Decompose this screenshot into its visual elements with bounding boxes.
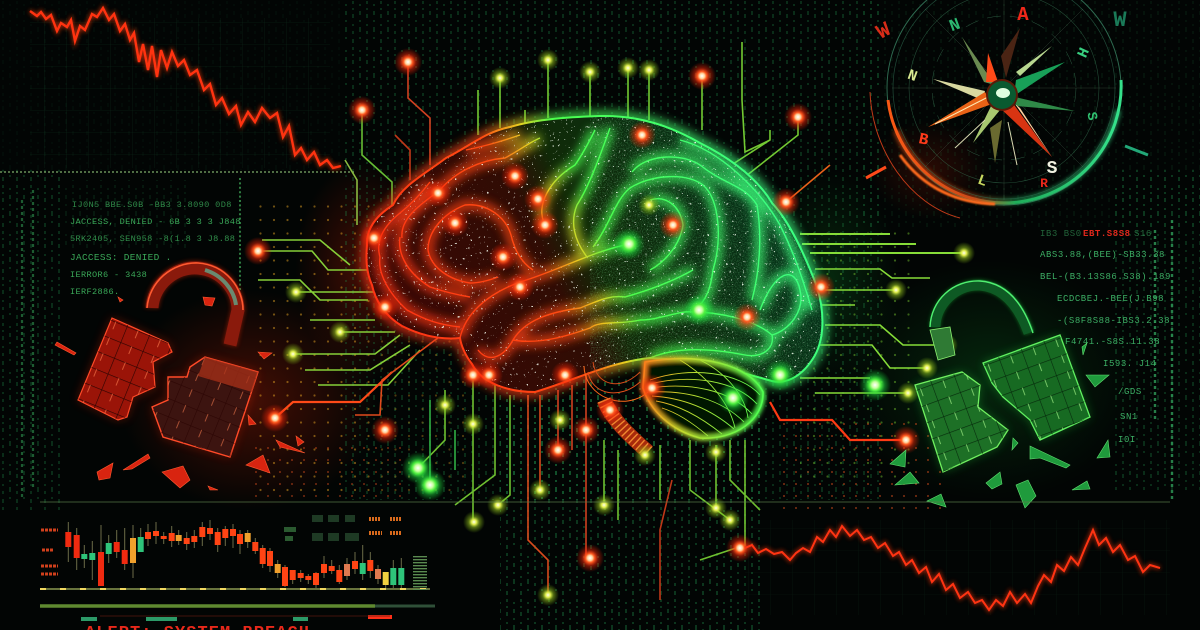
- compass hub: [986, 79, 1018, 111]
- cerebellum: [643, 359, 763, 438]
- brain body fill: [367, 116, 822, 392]
- brain: [360, 110, 830, 400]
- brain folds, soft glow: [379, 128, 812, 358]
- traces: bottom: [418, 375, 760, 600]
- right status text: I593. J14: [1103, 359, 1157, 369]
- compass dial rings: [870, 0, 1121, 218]
- brain folds, crisp lines: [379, 128, 812, 358]
- compass letters: R: [1040, 176, 1048, 191]
- right status text: SN1: [1120, 412, 1138, 422]
- compass letters: B: [917, 130, 931, 150]
- compass letters: W: [1113, 8, 1127, 33]
- compass letters: W: [873, 19, 895, 45]
- compass letters: A: [1017, 4, 1029, 26]
- left status text: JACCESS: DENIED .: [70, 252, 172, 263]
- traces: top: [345, 42, 830, 225]
- right status text: ABS3.88,(BEE)-SB33.38: [1040, 250, 1165, 260]
- compass letters: H: [1075, 45, 1094, 61]
- broken green padlock: [890, 281, 1110, 508]
- traces: right: [770, 234, 964, 440]
- brain outline: [367, 116, 822, 392]
- chart baseline and bars: [40, 588, 430, 590]
- left status text: IERROR6 - 3438: [70, 270, 147, 280]
- green lock body right fragment: [983, 335, 1090, 440]
- right status text: ECDCBEJ.-BEE(J.B98: [1057, 294, 1164, 304]
- compass letters: S: [1047, 159, 1058, 179]
- brain speckles: [360, 110, 830, 400]
- glowing nodes: [244, 48, 975, 606]
- right status text: BEL-(B3.13S86.S38).189: [1040, 272, 1171, 282]
- right status text: S16: [1134, 229, 1152, 239]
- right status text: EBT.S8S8: [1083, 229, 1131, 239]
- red lock shards: [55, 297, 305, 490]
- right status text: IB3 BS0: [1040, 229, 1082, 239]
- green candles: [84, 537, 401, 585]
- green lock shards: [890, 343, 1110, 508]
- falling red line chart, bottom right: [745, 520, 1170, 615]
- compass: [866, 0, 1148, 218]
- left status text: 5RK2405, SEN958 -8(1.8 3 J8.88: [70, 234, 235, 244]
- brain stem: [584, 362, 648, 452]
- compass letters: S: [1082, 111, 1100, 122]
- colour glows: [120, 120, 1140, 510]
- compass letters: N: [947, 16, 963, 37]
- orange and salmon candles: [133, 533, 278, 573]
- compass outer ticks: [866, 146, 1148, 178]
- right status text: [1040, 229, 1171, 445]
- red candles: [68, 532, 125, 586]
- left status text: [70, 200, 241, 297]
- right status text: I0I: [1118, 435, 1136, 445]
- left status text: JACCESS, DENIED - 6B 3 3 3 J848: [70, 217, 241, 227]
- circuit traces: [258, 42, 964, 600]
- dashboard tiles: [284, 515, 359, 541]
- right status text: F4741.-S8S.11.38: [1065, 337, 1160, 347]
- broken red padlock: [55, 263, 305, 490]
- red lock body left fragment: [78, 318, 172, 420]
- dot grids: [250, 200, 950, 510]
- green lock shackle: [930, 281, 1033, 360]
- red lock shackle: [147, 263, 243, 345]
- left status text: IERF2886.: [70, 287, 120, 297]
- compass letters: [873, 4, 1127, 191]
- left status text: IJ0N5 BBE.S0B -BB3 3.8090 0D8: [72, 200, 232, 210]
- candlestick chart, bottom left: [40, 502, 1170, 619]
- falling red line chart, top left: [0, 8, 355, 172]
- candle wicks: [68, 520, 401, 590]
- compass letters: N: [905, 67, 919, 86]
- compass letters: L: [975, 172, 989, 191]
- red lock body right fragment: [152, 357, 258, 457]
- brain green mottling: [590, 110, 830, 390]
- green lock body left fragment: [915, 372, 1008, 472]
- right status text: -(S8F8S88-IBS3.2.38: [1057, 316, 1170, 326]
- right status text: /GDS: [1118, 387, 1142, 397]
- brain outer glow: [367, 116, 822, 392]
- traces: left: [258, 240, 455, 418]
- compass needle star: [928, 28, 1075, 165]
